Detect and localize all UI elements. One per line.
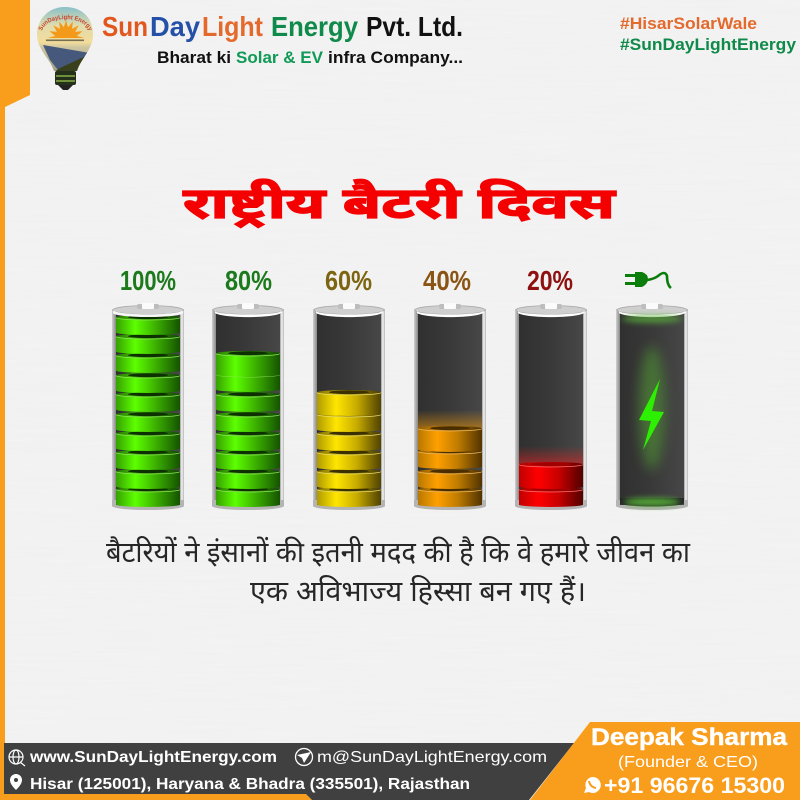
percent labels xyxy=(120,265,573,296)
header: company name: Light xyxy=(202,11,263,42)
body text: बैटरियों ने इंसानों की इतनी मदद की है कि वे हमारे जीवन का xyxy=(106,536,691,569)
email: m@SunDayLightEnergy.com xyxy=(317,749,547,766)
hashtags xyxy=(620,14,797,54)
footer: dark contact bar xyxy=(4,743,574,800)
hashtags: #SunDayLightEnergy xyxy=(620,35,797,54)
percent labels: 20% xyxy=(527,265,573,296)
logo tagline line xyxy=(46,40,84,41)
battery 100% xyxy=(112,303,184,510)
battery 80% xyxy=(212,303,284,510)
battery 40% xyxy=(414,303,486,510)
header: company name: Day xyxy=(150,11,200,42)
ground xyxy=(56,56,85,71)
bulb arc text: SunDayLight Energy xyxy=(38,14,92,30)
founder role: (Founder & CEO) xyxy=(618,754,758,771)
address: Hisar (125001), Haryana & Bhadra (335501), Rajasthan xyxy=(30,776,470,793)
icon: plug xyxy=(625,272,671,288)
header: company name: Pvt. Ltd. xyxy=(366,11,463,42)
percent labels: 80% xyxy=(225,265,272,296)
bulb base xyxy=(55,71,76,85)
founder name: Deepak Sharma xyxy=(591,724,788,751)
body text: एक अविभाज्य हिस्सा बन गए हैं। xyxy=(250,575,586,608)
logo: solar light bulb xyxy=(37,7,93,90)
header: tagline: Bharat ki xyxy=(157,48,231,67)
icon: whatsapp xyxy=(584,777,601,793)
header: company name xyxy=(102,11,463,42)
header: tagline: Solar & EV xyxy=(236,48,324,67)
battery 60% xyxy=(313,303,385,510)
website: www.SunDayLightEnergy.com xyxy=(29,749,277,766)
header: tagline xyxy=(157,48,463,67)
battery charging xyxy=(616,303,688,510)
header: company name: Sun xyxy=(102,11,148,42)
percent labels: 40% xyxy=(423,265,471,296)
icon: location pin xyxy=(10,774,22,790)
title: राष्ट्रीय बैटरी दिवस xyxy=(183,179,617,229)
footer: orange strip xyxy=(4,794,312,800)
icon: globe xyxy=(9,750,25,766)
percent labels: 100% xyxy=(120,265,176,296)
percent labels: 60% xyxy=(325,265,372,296)
footer: orange founder panel xyxy=(530,722,800,800)
header: company name: Energy xyxy=(271,11,358,42)
icon: mail xyxy=(296,748,312,766)
solar panels xyxy=(43,45,90,70)
hashtags: #HisarSolarWale xyxy=(620,14,757,33)
icon: sun xyxy=(48,20,84,38)
phone number: +91 96676 15300 xyxy=(604,773,785,798)
body text xyxy=(106,536,691,608)
header: tagline: infra Company... xyxy=(328,48,463,67)
icon: lightning bolt xyxy=(639,379,664,450)
orange corner and side strip xyxy=(0,0,30,800)
battery 20% xyxy=(515,303,587,510)
